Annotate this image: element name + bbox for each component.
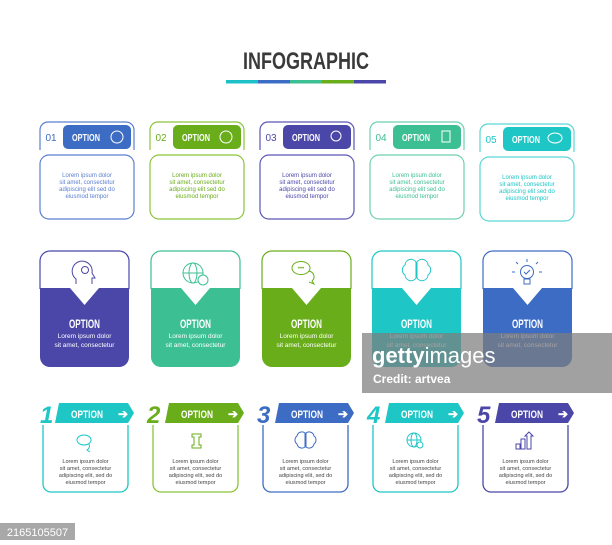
icon: globe pin	[183, 263, 208, 285]
row 3 step 1: eiusmod tempor	[65, 480, 106, 486]
row 3 step 5: 5	[477, 402, 491, 429]
row 3 step 1	[40, 402, 134, 492]
row 3 step 3: Lorem ipsum dolor	[282, 459, 329, 465]
icon: head	[111, 131, 123, 143]
row 1 card 03: Lorem ipsum dolor	[282, 173, 332, 179]
row 2 card blue: sit amet, consectetur	[498, 342, 558, 349]
row 2 card teal: sit amet, consectetur	[387, 342, 447, 349]
title: INFOGRAPHIC	[243, 48, 369, 75]
row 2 card purple	[40, 251, 129, 367]
row 2 card green	[262, 251, 351, 367]
row 1 card 05: eiusmod tempor	[505, 196, 549, 202]
icon: brain	[220, 131, 232, 143]
row 3 step 3: eiusmod tempor	[285, 480, 326, 486]
row 3 step 5: adipiscing elit, sed do	[499, 473, 552, 479]
row 2 card green-teal	[151, 251, 240, 367]
row 3 step 1: Lorem ipsum dolor	[62, 459, 109, 465]
row 2 card green-teal: sit amet, consectetur	[166, 342, 226, 349]
watermark	[362, 333, 612, 393]
row 3 step 2: 2	[146, 402, 161, 429]
row 1 card 02: Lorem ipsum dolor	[172, 173, 222, 179]
row 3 step 1: ➔	[118, 407, 128, 421]
row 2 card blue: Lorem ipsum dolor	[501, 333, 555, 340]
row 3 step 1: sit amet, consectetur	[60, 466, 111, 472]
row 1 card 03	[260, 122, 354, 219]
row 3 step 1: OPTION	[71, 409, 103, 421]
row 1 card 02	[150, 122, 244, 219]
row 1 card 04: 04	[375, 133, 387, 144]
icon: globe	[407, 433, 423, 448]
row 3 step 3: ➔	[338, 407, 348, 421]
row 1 card 04: eiusmod tempor	[395, 194, 439, 200]
row 3 step 5: sit amet, consectetur	[500, 466, 551, 472]
row 1 card 03: eiusmod tempor	[285, 194, 329, 200]
row 2 card blue: OPTION	[512, 317, 543, 331]
row 1 card 01: adipiscing elit sed do	[59, 187, 116, 193]
row 3 step 4: sit amet, consectetur	[390, 466, 441, 472]
icon: brain	[295, 432, 316, 448]
icon: chess rook	[192, 434, 201, 448]
row 1 card 05: Lorem ipsum dolor	[502, 175, 552, 181]
row 3 step 2: sit amet, consectetur	[170, 466, 221, 472]
row 2 card teal: Lorem ipsum dolor	[390, 333, 444, 340]
row 1 card 02: OPTION	[182, 133, 210, 144]
icon: chat	[77, 435, 91, 452]
icon: chat	[548, 133, 562, 143]
row 1 card 01: 01	[45, 133, 57, 144]
row 1 card 01	[40, 122, 134, 219]
row 3 step 3: adipiscing elit, sed do	[279, 473, 332, 479]
icon: chess	[442, 131, 450, 142]
row 2 card blue	[483, 251, 572, 367]
row 1 card 05: 05	[485, 135, 497, 146]
icon: chat bubbles: •••	[298, 266, 304, 272]
row 1 card 04	[370, 122, 464, 219]
row 1 card 05	[480, 124, 574, 221]
row 1 card 04: Lorem ipsum dolor	[392, 173, 442, 179]
row 2 card teal: OPTION	[401, 317, 432, 331]
row 1 card 01: eiusmod tempor	[65, 194, 109, 200]
row 3 step 1: adipiscing elit, sed do	[59, 473, 112, 479]
row 2 card green-teal: OPTION	[180, 317, 211, 331]
row 3 step 4: OPTION	[401, 409, 433, 421]
icon: brain	[402, 259, 431, 281]
row 1 card 01: OPTION	[72, 133, 100, 144]
row 1 card 03: adipiscing elit sed do	[279, 187, 336, 193]
row 3 step 1: 1	[40, 402, 53, 429]
row 2 card teal	[372, 251, 461, 367]
row 1 card 05: sit amet, consectetur	[499, 182, 555, 188]
row 2 card green-teal: Lorem ipsum dolor	[169, 333, 223, 340]
row 1 card 03: sit amet, consectetur	[279, 180, 335, 186]
row 3 step 2: adipiscing elit, sed do	[169, 473, 222, 479]
row 1 card 01: sit amet, consectetur	[59, 180, 115, 186]
row 3 step 3: 3	[257, 402, 271, 429]
row 2 card purple: sit amet, consectetur	[55, 342, 115, 349]
row 3 step 3	[257, 402, 354, 492]
row 1 card 05: adipiscing elit sed do	[499, 189, 556, 195]
image id: 2165105507	[7, 527, 68, 539]
row 1 card 04: OPTION	[402, 133, 430, 144]
row 3 step 2	[146, 402, 244, 492]
row 1 card 01: Lorem ipsum dolor	[62, 173, 112, 179]
row 1 card 03: 03	[265, 133, 277, 144]
title	[226, 48, 386, 84]
row 1 card 02: sit amet, consectetur	[169, 180, 225, 186]
row 3 step 2: eiusmod tempor	[175, 480, 216, 486]
watermark: Credit: artvea	[373, 372, 451, 386]
row 3 step 2: OPTION	[181, 409, 213, 421]
row 3 step 4: Lorem ipsum dolor	[392, 459, 439, 465]
icon: bulb	[331, 131, 341, 141]
row 3 step 3: sit amet, consectetur	[280, 466, 331, 472]
row 1 card 02: adipiscing elit sed do	[169, 187, 226, 193]
row 1 card 04: sit amet, consectetur	[389, 180, 445, 186]
row 2 card green: sit amet, consectetur	[277, 342, 337, 349]
row 3 step 2: ➔	[228, 407, 238, 421]
icon: bulb	[512, 259, 542, 284]
row 2 card green: OPTION	[291, 317, 322, 331]
icon: bar chart	[516, 432, 533, 449]
row 3 step 3: OPTION	[291, 409, 323, 421]
row 3 step 5: ➔	[558, 407, 568, 421]
row 3 step 4	[366, 402, 464, 492]
row 3 step 2: Lorem ipsum dolor	[172, 459, 219, 465]
row 2 card purple: Lorem ipsum dolor	[58, 333, 112, 340]
icon: head gear	[72, 261, 95, 284]
row 1 card 05: OPTION	[512, 135, 540, 146]
row 1 card 02: 02	[155, 133, 167, 144]
row 3 step 5: eiusmod tempor	[505, 480, 546, 486]
row 3 step 5: OPTION	[511, 409, 543, 421]
row 3 step 4: ➔	[448, 407, 458, 421]
row 3 step 4: eiusmod tempor	[395, 480, 436, 486]
row 1 card 03: OPTION	[292, 133, 320, 144]
row 2 card green: Lorem ipsum dolor	[280, 333, 334, 340]
row 3 step 5: Lorem ipsum dolor	[502, 459, 549, 465]
row 3 step 4: adipiscing elit, sed do	[389, 473, 442, 479]
row 3 step 4: 4	[366, 402, 380, 429]
row 1 card 04: adipiscing elit sed do	[389, 187, 446, 193]
watermark: gettyimages	[372, 343, 495, 368]
row 3 step 5	[477, 402, 574, 492]
image id	[0, 523, 75, 540]
row 2 card purple: OPTION	[69, 317, 100, 331]
row 1 card 02: eiusmod tempor	[175, 194, 219, 200]
